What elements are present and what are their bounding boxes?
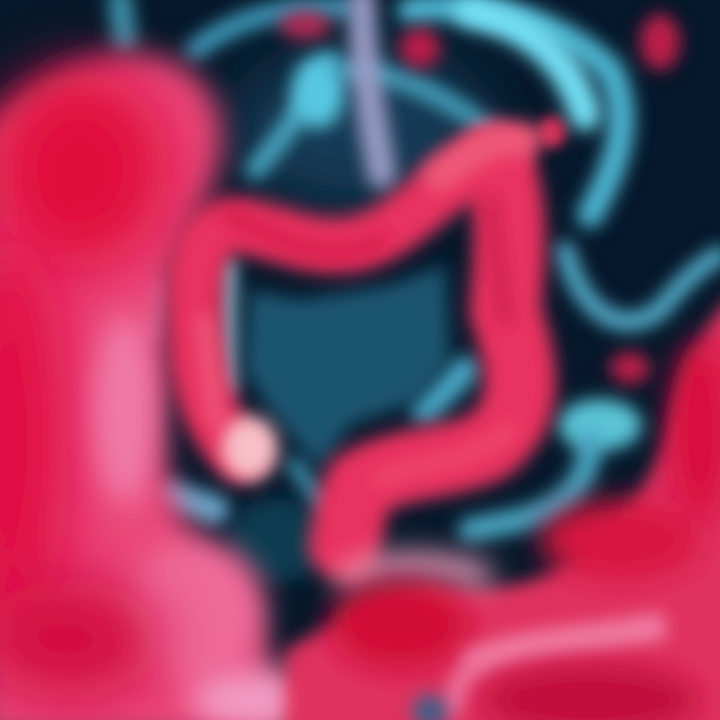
floating red cells (279, 11, 680, 384)
colon: pink-red tube (195, 139, 525, 545)
bottom mass: red and pink tissue (285, 290, 720, 720)
colon end: pale pink bulb (222, 416, 278, 480)
dark pocket: lower centre (228, 498, 328, 582)
centre: dark teal lumen (245, 265, 450, 470)
left mass: large red and pink tissue (0, 54, 340, 720)
background strands: cyan ribbons (120, 0, 720, 530)
